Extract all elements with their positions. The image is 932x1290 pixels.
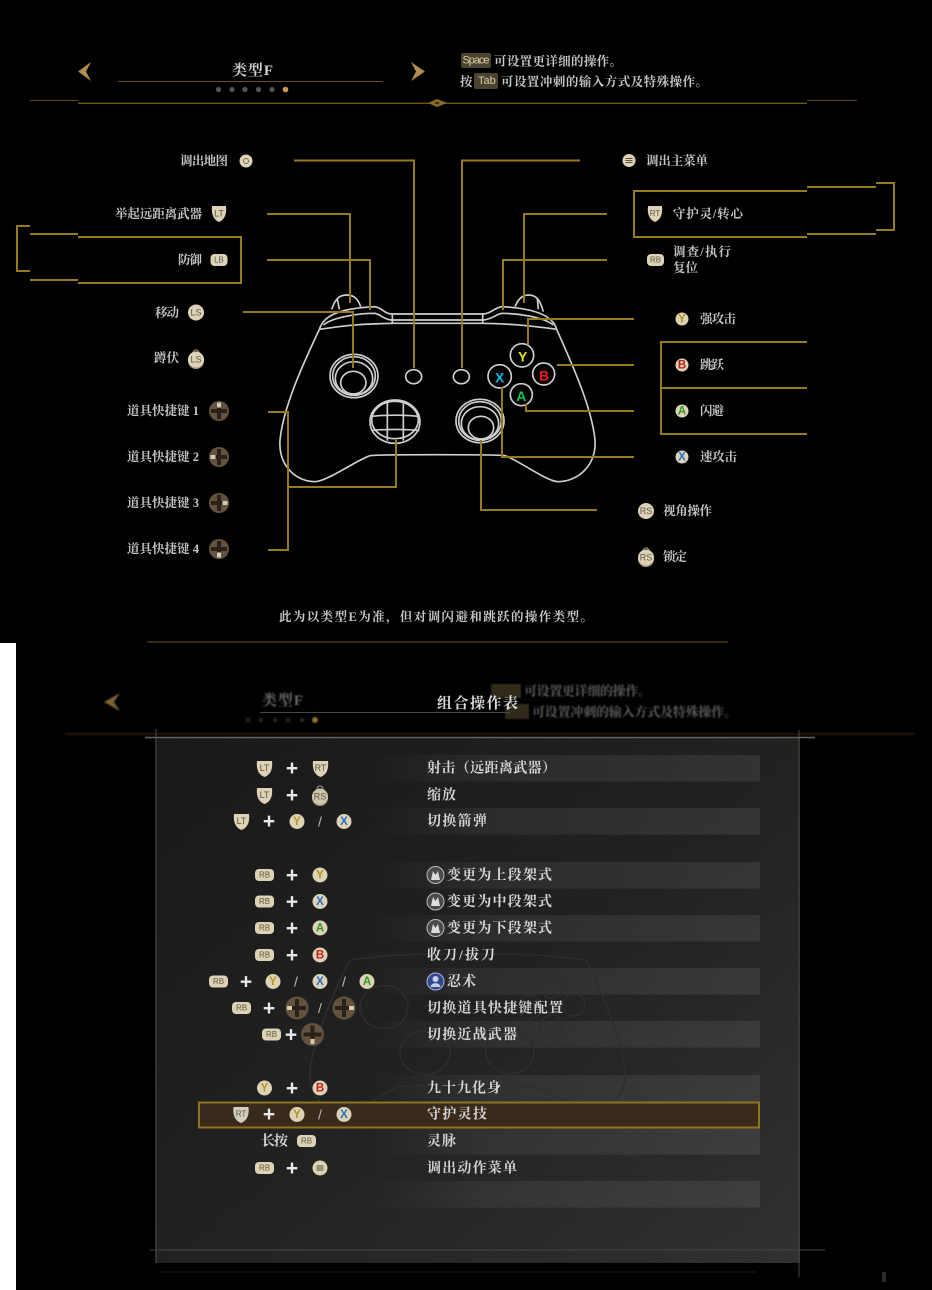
label: investigate, execute, reset: 复位 [673, 260, 698, 275]
highlight box: jump and dodge [661, 342, 807, 434]
row: guardian spirit skill: 守护灵技 [427, 1106, 487, 1122]
row: ninjutsu [209, 970, 476, 994]
row: switch arrows: Y [293, 816, 301, 828]
label: item shortcut 1 [127, 401, 229, 421]
white strip at left edge [0, 643, 16, 1290]
row: zoom [257, 784, 456, 807]
row: shoot ranged weapon: LT [260, 763, 270, 773]
label: main menu: 调出主菜单 [646, 153, 708, 168]
controller body outline [280, 329, 595, 482]
label: main menu [622, 153, 708, 168]
label: heavy attack [676, 311, 736, 326]
label: heavy attack: Y [678, 314, 686, 326]
row: switch item shortcut set: + [263, 997, 275, 1020]
footnote text: 此为以类型E为准，但对调闪避和跳跃的操作类型。 [279, 609, 593, 624]
row stripes [370, 755, 760, 1208]
row: action menu: + [286, 1157, 298, 1180]
face button Y [510, 344, 534, 367]
row: ninjutsu: / [294, 974, 298, 990]
row: switch arrows: LT [237, 816, 247, 826]
row: switch item shortcut set: / [318, 1000, 322, 1016]
row: mid stance [255, 890, 552, 914]
label: investigate, execute, reset: 调查/执行 [673, 244, 731, 259]
row: ninjutsu: + [240, 970, 252, 994]
row: ninety-nine avatars: + [286, 1077, 298, 1100]
row: low stance [255, 917, 552, 940]
label: guard: 防御 [178, 252, 202, 267]
combo table panel [145, 729, 886, 1282]
label: guard [178, 252, 228, 267]
arrow: next type [411, 62, 425, 81]
row: action menu: RB [259, 1164, 270, 1172]
small mark at bottom right [882, 1272, 886, 1282]
highlight box: guard [17, 226, 241, 283]
page indicator dots [216, 87, 288, 92]
label: crouch: 蹲伏 [154, 350, 179, 365]
row: ninjutsu: / [342, 974, 346, 990]
row: spirit vein: 灵脉 [427, 1132, 456, 1150]
row: spirit vein: RB [301, 1136, 312, 1146]
row: spirit vein [261, 1132, 456, 1150]
label: item shortcut 4: 道具快捷键 4 [127, 541, 200, 556]
triggers [332, 295, 543, 312]
label: item shortcut 3: 道具快捷键 3 [127, 495, 199, 510]
ghost controller behind panel [310, 954, 625, 1113]
label: raise ranged weapon [115, 206, 226, 222]
title underline [260, 712, 510, 714]
row: guardian spirit skill: RT [236, 1110, 246, 1118]
blurred hint lines [491, 684, 737, 720]
hint text: space key: 可设置更详细的操作。 [494, 54, 622, 68]
row: switch melee weapon [262, 1023, 517, 1046]
row: zoom: RS [314, 792, 326, 802]
label: investigate, execute, reset: RB [650, 256, 661, 264]
row: switch item shortcut set: RB [236, 1004, 247, 1012]
face button A [510, 384, 532, 406]
row: low stance: 变更为下段架式 [447, 920, 552, 936]
row: switch item shortcut set [232, 996, 563, 1020]
row: guardian spirit skill: + [263, 1103, 275, 1126]
label: dodge: A [678, 406, 686, 418]
label: item shortcut 2: 道具快捷键 2 [127, 449, 199, 464]
row: low stance: RB [259, 924, 270, 932]
row: sheathe and draw: + [286, 944, 298, 967]
panel background [155, 737, 800, 1263]
label: move: LS [190, 308, 202, 318]
row: low stance: + [286, 917, 298, 940]
row: guardian spirit skill [233, 1103, 487, 1126]
row: mid stance: + [286, 890, 298, 914]
heading: type F: 类型F [232, 61, 273, 79]
label: item shortcut 2 [127, 447, 229, 467]
row: sheathe and draw: B [316, 950, 324, 962]
label: light attack [676, 449, 737, 464]
shoulder bumpers [319, 307, 557, 329]
row: high stance: Y [316, 870, 324, 882]
blurred arrow [104, 693, 120, 711]
label: camera: RS [640, 506, 652, 516]
row: shoot ranged weapon [257, 757, 556, 780]
hint text: tab key: 按 [460, 74, 474, 89]
row: low stance: A [316, 922, 324, 934]
row: ninjutsu: A [363, 976, 371, 988]
label: map [180, 153, 252, 168]
ornamental divider [30, 99, 857, 107]
label: heavy attack: 强攻击 [700, 311, 736, 326]
panel frame [150, 729, 825, 1277]
row: action menu [255, 1157, 517, 1180]
row: switch arrows: X [340, 816, 348, 828]
row: high stance: 变更为上段架式 [447, 866, 552, 884]
controller diagram [280, 295, 595, 482]
row: switch melee weapon: 切换近战武器 [427, 1026, 517, 1043]
highlight box: guardian spirit [634, 183, 894, 237]
highlighted row: guardian spirit skill [199, 1102, 759, 1128]
label: camera: 视角操作 [663, 503, 712, 518]
row: sheathe and draw: 收刀/拔刀 [427, 946, 495, 964]
row: high stance: + [286, 864, 298, 887]
row: switch arrows: 切换箭弹 [427, 812, 487, 830]
label: crouch [154, 350, 204, 369]
label: move [155, 304, 204, 320]
hint text: space key: Space [462, 54, 490, 66]
blurred hint lines: 可设置冲刺的输入方式及特殊操作。 [532, 704, 737, 720]
label: guard: LB [214, 256, 224, 264]
row: zoom: + [286, 784, 298, 807]
row: shoot ranged weapon: + [286, 757, 298, 780]
label: map: 调出地图 [180, 153, 228, 168]
row: switch melee weapon: + [285, 1024, 297, 1046]
panel top edge [145, 736, 815, 738]
blurred hint lines: 可设置更详细的操作。 [524, 684, 651, 698]
orange line below panel [160, 1271, 757, 1273]
row: guardian spirit skill: X [340, 1109, 348, 1121]
face button B [533, 363, 555, 385]
row: ninety-nine avatars: B [316, 1082, 324, 1094]
label: guardian spirit, mind switch [648, 206, 744, 222]
row: zoom: LT [260, 790, 270, 800]
row: high stance [255, 864, 552, 887]
callout leader lines [243, 160, 634, 550]
face button A: A [516, 388, 526, 404]
title underline [118, 80, 383, 82]
label: lock on: 锁定 [663, 549, 687, 564]
row: shoot ranged weapon: 射击（远距离武器） [427, 760, 556, 776]
label: crouch: LS [190, 354, 202, 364]
label: guardian spirit, mind switch: 守护灵/转心 [673, 206, 744, 221]
face button Y: Y [518, 349, 528, 365]
right stick [456, 399, 504, 443]
row: ninjutsu: Y [269, 976, 277, 988]
row: switch melee weapon: RB [266, 1030, 277, 1039]
row: ninjutsu: X [316, 976, 324, 988]
row: ninety-nine avatars: 九十九化身 [427, 1080, 501, 1096]
view and menu buttons [406, 370, 469, 384]
label: investigate, execute, reset [647, 244, 731, 275]
row: switch item shortcut set: 切换道具快捷键配置 [427, 1000, 563, 1016]
label: lock on [638, 548, 687, 567]
label: guardian spirit, mind switch: RT [650, 209, 660, 218]
left stick [330, 354, 378, 398]
row: shoot ranged weapon: RT [315, 763, 327, 773]
label: move: 移动 [155, 305, 179, 320]
row: switch arrows: + [263, 810, 275, 833]
row: switch arrows [234, 810, 487, 833]
panel title: 组合操作表 [437, 694, 518, 712]
row: switch arrows: / [318, 814, 322, 830]
arrow: previous type [78, 62, 91, 81]
label: raise ranged weapon: 举起远距离武器 [115, 206, 202, 221]
label: item shortcut 3 [127, 493, 229, 513]
left labels [115, 153, 252, 559]
panel grain [155, 737, 800, 1263]
blurred divider [65, 733, 915, 735]
label: item shortcut 4 [127, 539, 229, 559]
header: control type selector [30, 53, 857, 107]
row: ninjutsu: RB [213, 977, 224, 986]
label: dodge [676, 403, 724, 418]
row: mid stance: X [316, 896, 324, 908]
label: raise ranged weapon: LT [214, 208, 224, 218]
row: mid stance: RB [259, 897, 270, 906]
label: jump: B [678, 360, 686, 372]
label: lock on: RS [640, 552, 652, 562]
combo rows [209, 757, 563, 1180]
row: action menu: 调出动作菜单 [427, 1160, 517, 1176]
face button X: X [495, 370, 505, 386]
row: spirit vein: 长按 [261, 1132, 289, 1150]
blurred dots [246, 717, 318, 723]
label: jump [676, 357, 724, 372]
row: mid stance: 变更为中段架式 [447, 893, 552, 910]
row: ninety-nine avatars: Y [261, 1082, 269, 1094]
label: dodge: 闪避 [700, 403, 724, 418]
hint text: tab key: 可设置冲刺的输入方式及特殊操作。 [501, 74, 708, 89]
label: item shortcut 1: 道具快捷键 1 [127, 403, 199, 418]
row: high stance: RB [259, 870, 270, 880]
directional pad [370, 400, 420, 443]
row: sheathe and draw [255, 944, 495, 967]
row: sheathe and draw: RB [259, 950, 270, 960]
row: zoom: 缩放 [427, 786, 456, 804]
hint text: tab key: Tab [478, 75, 496, 87]
blurred type heading: 类型F [262, 691, 303, 709]
row: guardian spirit skill: / [318, 1106, 322, 1122]
label: light attack: X [678, 452, 686, 464]
row: ninjutsu: 忍术 [447, 973, 476, 990]
label: camera [638, 503, 712, 519]
row: guardian spirit skill: Y [293, 1109, 301, 1121]
footnote divider [147, 641, 728, 643]
label: jump: 跳跃 [700, 357, 724, 372]
label: light attack: 速攻击 [700, 449, 737, 464]
face button X [488, 365, 511, 388]
blurred background header [65, 684, 915, 734]
right labels [622, 153, 744, 567]
row: ninety-nine avatars [257, 1077, 501, 1100]
face button B: B [539, 367, 549, 383]
